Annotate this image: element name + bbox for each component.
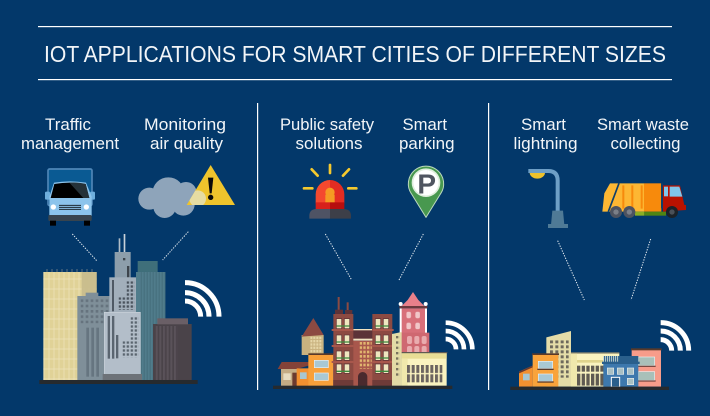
panel: small city: [510, 115, 689, 390]
artwork: medium city: [273, 165, 472, 389]
illustration: mid-size buildings: [273, 292, 452, 389]
icon: siren: [304, 165, 356, 219]
artwork: small city: [510, 171, 689, 390]
label: smart waste collecting: Smart waste: [597, 115, 689, 134]
label: smart waste collecting: collecting: [610, 134, 680, 153]
title: IOT APPLICATIONS FOR SMART CITIES OF DIFFERENT SIZES: [44, 41, 666, 67]
label: traffic management: Traffic: [45, 115, 91, 134]
label: monitoring air quality: Monitoring: [144, 115, 226, 134]
icon: wifi signal: [446, 323, 472, 349]
icon: parking pin: P: [417, 169, 436, 200]
icon: street lamp: [528, 171, 568, 228]
label: traffic management: management: [21, 134, 119, 153]
icon: cloud with warning sign: [138, 165, 235, 218]
label: public safety solutions: Public safety: [280, 115, 374, 134]
artwork: large city: [39, 165, 235, 384]
icon: garbage truck: [602, 183, 686, 218]
label: smart lightning: lightning: [514, 134, 578, 153]
illustration: small buildings: [510, 331, 669, 390]
label: smart parking: parking: [399, 134, 454, 153]
label: monitoring air quality: air quality: [150, 134, 223, 153]
label: smart parking: Smart: [402, 115, 447, 134]
icon: truck: [45, 169, 95, 226]
label: public safety solutions: solutions: [296, 134, 362, 153]
illustration: skyscrapers: [39, 234, 198, 384]
panel: large city: [21, 115, 235, 384]
panel: medium city: [273, 115, 472, 389]
icon: wifi signal: [661, 323, 689, 351]
icon: wifi signal: [185, 283, 219, 317]
label: smart lightning: Smart: [521, 115, 566, 134]
icon: parking pin: [408, 166, 444, 217]
